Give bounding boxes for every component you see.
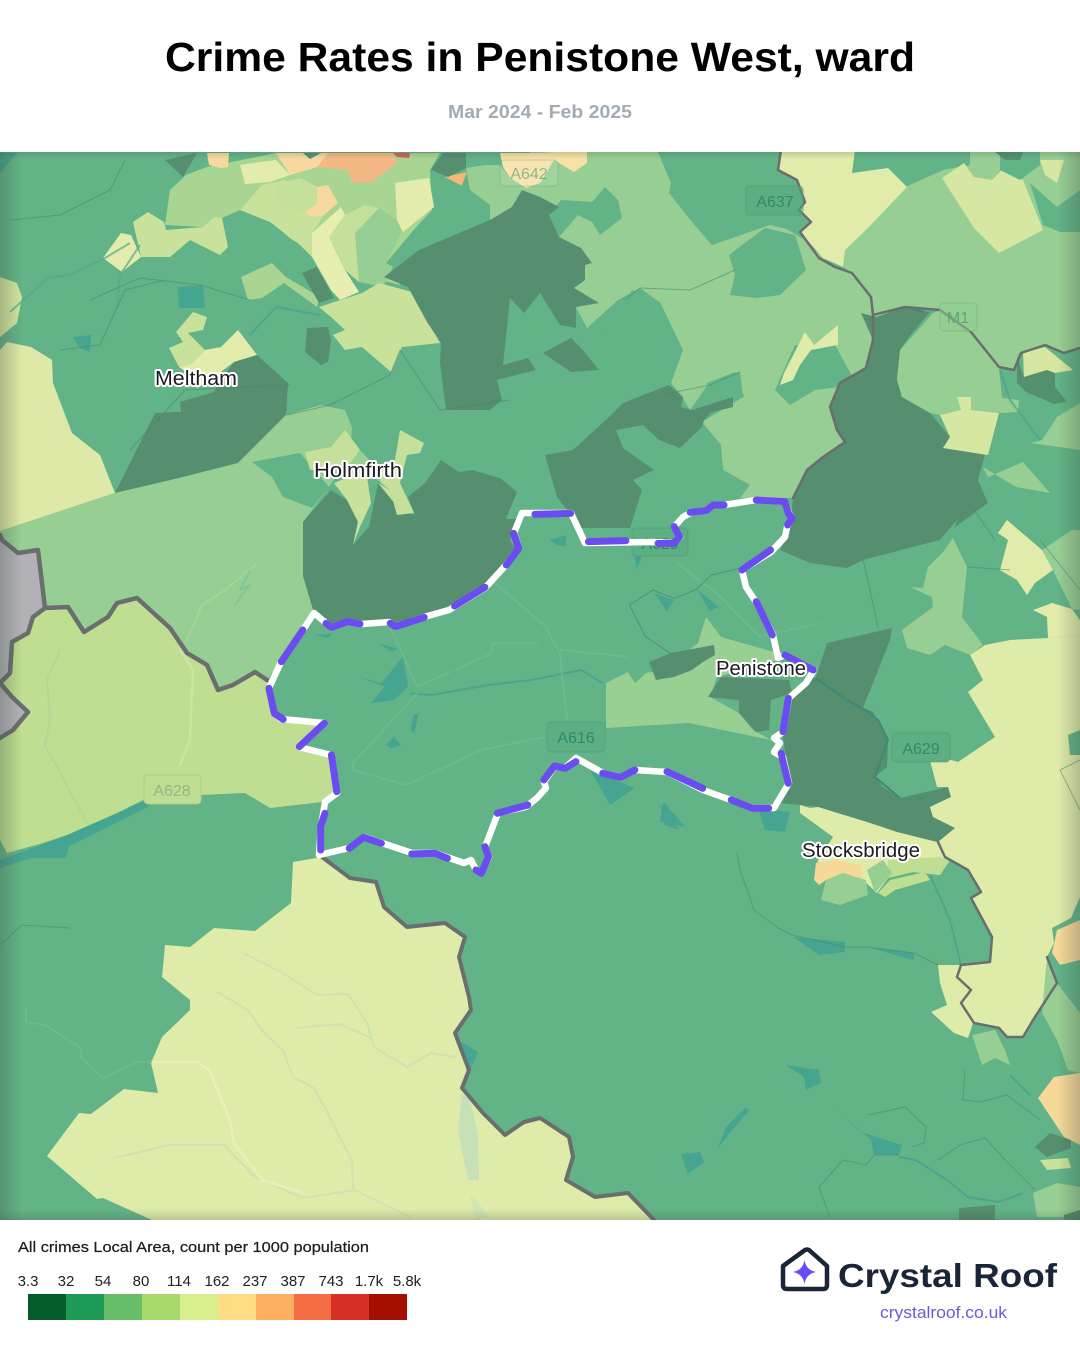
- road label: A616: A616: [557, 730, 595, 747]
- legend: [18, 1239, 422, 1320]
- map area: yellow piece south-east: [931, 965, 973, 1038]
- road label: A629: A629: [902, 741, 940, 758]
- map area: central-north green patches: [549, 184, 852, 498]
- map area: grey no-data block: [0, 535, 45, 738]
- logo wordmark: Crystal Roof: [838, 1257, 1058, 1294]
- map area: rivers and roads in south-west: [26, 565, 455, 1217]
- road label: A628: A628: [153, 783, 191, 800]
- road label: A-road under ward boundary: A629: [641, 536, 679, 553]
- title: Crime Rates in Penistone West, ward: [165, 34, 915, 80]
- map area: river lines: [10, 243, 1040, 1202]
- map area: Penistone dark patches: [649, 645, 792, 732]
- town label: Penistone: Penistone: [716, 658, 806, 680]
- road label: A-road under ward boundary: [632, 528, 688, 556]
- map area: dark block north-west of ward: [303, 460, 519, 628]
- road label: M1: [940, 303, 977, 331]
- legend title: All crimes Local Area, count per 1000 population: [18, 1239, 369, 1256]
- map area: south-west yellow moor: [47, 857, 654, 1220]
- road label: A637: A637: [756, 194, 794, 211]
- map area: north-east yellow: [942, 163, 1043, 253]
- map area: north yellow: [778, 150, 907, 267]
- map area: Meltham town patches: [169, 312, 207, 367]
- town label: Meltham: Meltham: [155, 368, 237, 390]
- road label: A628: [144, 775, 201, 804]
- road label: M1: M1: [947, 310, 969, 327]
- map area: east side green and patches: [864, 458, 988, 560]
- road label: A616: [547, 722, 605, 752]
- map area: Penistone light green: [606, 617, 778, 740]
- legend tick labels: [18, 1273, 422, 1290]
- map area: central-north yellow: [780, 325, 838, 385]
- map area: big dark central north: [384, 190, 599, 410]
- map area: rivers and roads inside ward: [353, 563, 820, 785]
- legend tick labels: 237: [242, 1273, 268, 1290]
- map area: central-north light green: [520, 150, 873, 498]
- legend colour scale: [28, 1294, 407, 1320]
- legend tick labels: 3.3: [18, 1273, 38, 1290]
- legend tick labels: 1.7k: [355, 1273, 384, 1290]
- road label: A642: A642: [510, 166, 548, 183]
- legend tick labels: 743: [318, 1273, 344, 1290]
- town label: Stocksbridge: Stocksbridge: [802, 840, 920, 862]
- map area: town band at top: [165, 153, 440, 285]
- legend tick labels: 162: [204, 1273, 230, 1290]
- icon: house with star: [783, 1250, 827, 1289]
- legend tick labels: 32: [58, 1273, 74, 1290]
- map area: west light green moor: [0, 405, 352, 690]
- map area: teal fragments west: [0, 153, 205, 868]
- road label: A642: [500, 160, 558, 186]
- map area: north green band: [906, 152, 970, 186]
- legend tick labels: 80: [133, 1273, 149, 1290]
- logo: Crystal Roof: [783, 1250, 1058, 1322]
- town label: Holmfirth: Holmfirth: [314, 460, 402, 482]
- map area: dark block east of Penistone: [780, 628, 955, 842]
- map area: Stocksbridge patches: [800, 805, 950, 893]
- legend tick labels: 5.8k: [393, 1273, 422, 1290]
- map area: east yellow: [928, 635, 1080, 1037]
- legend tick labels: 54: [95, 1273, 111, 1290]
- legend tick labels: 114: [167, 1273, 191, 1290]
- map area: dark block north of ward: [545, 385, 733, 528]
- website url: crystalroof.co.uk: [880, 1304, 1008, 1322]
- map area: Meltham dark block: [115, 355, 288, 493]
- map area: dark north-east block: [780, 307, 988, 568]
- road label: A637: [746, 186, 803, 215]
- map area: thin boundary lines: [0, 160, 1080, 1218]
- map area: north-east light green: [843, 152, 1080, 370]
- legend tick labels: 387: [280, 1273, 306, 1290]
- ward boundary: Penistone West: [269, 500, 814, 873]
- map area: grey administrative boundary: [0, 150, 1080, 1220]
- map area: west yellow: [0, 342, 115, 531]
- road label: A629: [892, 733, 950, 762]
- map area: right edge strips and town patches: [1042, 957, 1080, 1073]
- choropleth map: [0, 150, 1080, 1220]
- map area: teal reservoirs: [590, 770, 914, 1174]
- map area: lime west: [0, 598, 337, 853]
- subtitle: date range: Mar 2024 - Feb 2025: [448, 102, 632, 122]
- map area: reservoirs inside ward: [315, 535, 719, 827]
